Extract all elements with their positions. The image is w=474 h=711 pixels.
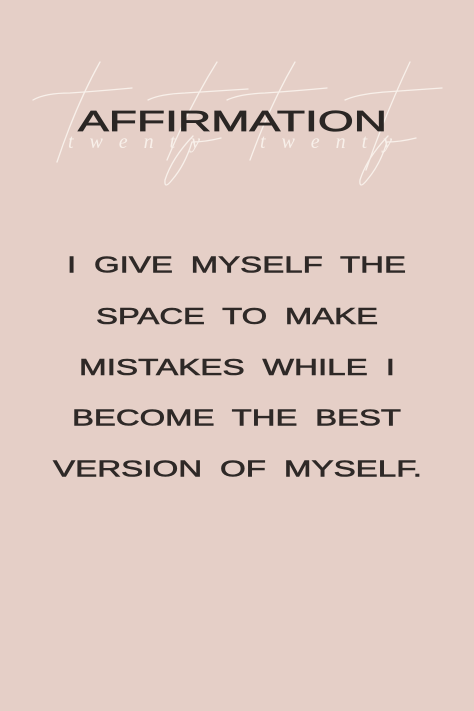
script lettering: twenty twenty: twenty [260,131,392,153]
affirmation text block: SPACE TO MAKE [96,303,378,329]
affirmation text block: VERSION OF MYSELF. [53,456,422,482]
affirmation text block [53,252,422,482]
affirmation text block: BECOME THE BEST [72,405,401,431]
title: AFFIRMATION: AFFIRMATION [78,106,387,138]
script lettering: twenty twenty [33,62,442,185]
script lettering: twenty twenty: twenty [68,131,200,153]
affirmation text block: MISTAKES WHILE I [79,354,395,380]
affirmation text block: I GIVE MYSELF THE [67,252,406,278]
